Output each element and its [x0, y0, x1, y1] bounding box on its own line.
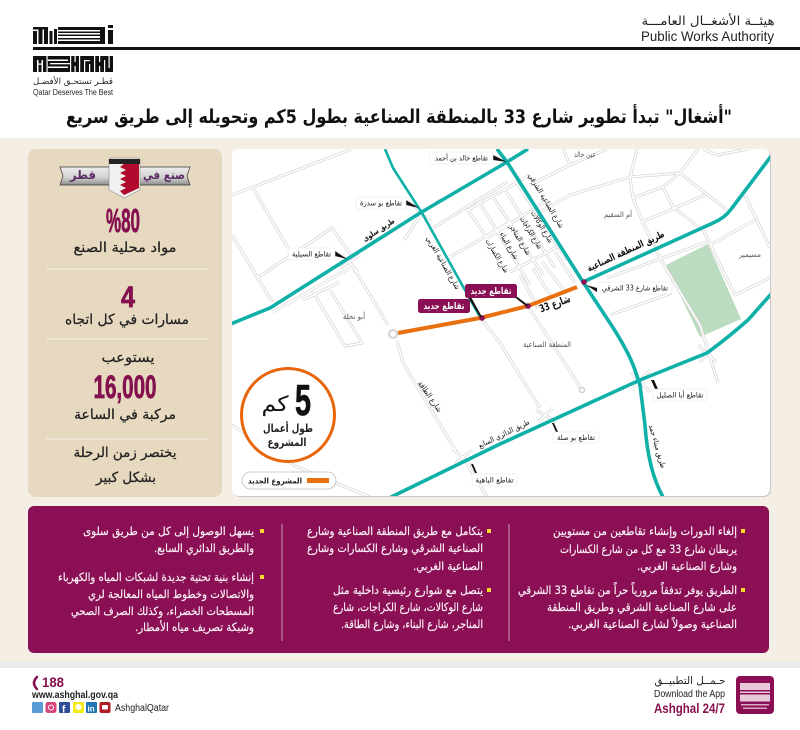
road names: شارع البناء: [498, 231, 521, 261]
bullets: right column: الصناعية وصولاً لشارع الصناعية الغربي.: [568, 616, 737, 632]
footer: contact: [31, 675, 170, 716]
roundabouts: [389, 330, 397, 338]
stat: 80 percent local materials: %80: [106, 202, 140, 239]
bullets: middle column: يتصل مع شوارع رئيسية داخلية مثل: [333, 583, 483, 598]
legend: new project: [242, 472, 336, 489]
logo tagline: Qatar Deserves The Best: [33, 87, 114, 97]
panel: map: [228, 149, 772, 500]
footer: app download: Ashghal 24/7: [654, 700, 725, 716]
bullets: middle column: يتكامل مع طريق المنطقة الصناعية وشارع: [307, 524, 483, 539]
callout: new junction (east): تقاطع جديد: [470, 287, 512, 297]
stat: journey time: [74, 445, 177, 486]
bullets: middle column: [307, 524, 491, 632]
junction label: Street 33 East: [598, 282, 672, 294]
map: streets and parks: [228, 149, 772, 500]
icons: social media: f: [62, 704, 66, 716]
icon: Ashghal app: [736, 676, 774, 714]
bullets: left column: المسطحات الخضراء، وكذلك الصرف الصحي: [71, 604, 254, 619]
junction label: Aba Al Saleel: [653, 389, 707, 401]
junction label: Al Bahiya: [472, 474, 517, 486]
highways: [228, 149, 772, 500]
badge: made in Qatar: قطر: [69, 168, 96, 182]
title: "أشغال" تبدأ تطوير شارع 33 بالمنطقة الصناعية بطول 5كم وتحويله إلى طريق سريع: [66, 104, 732, 128]
callout: new junction (west): [418, 299, 470, 313]
bullets: right column: يربطان شارع 33 مع كل من شارع الكسارات: [560, 542, 737, 557]
road names: طريق المنطقة الصناعية: [586, 229, 666, 274]
bullets: left column: إنشاء بنية تحتية جديدة لشبكات المياه والكهرباء: [58, 570, 254, 585]
footer: app download: [654, 675, 774, 716]
stat: 16,000 vehicles per hour: 16,000: [94, 369, 156, 405]
legend: new project: المشروع الجديد: [248, 476, 302, 486]
stat: 80 percent local materials: مواد محلية الصنع: [74, 240, 176, 256]
bullets: left column: يسهل الوصول إلى كل من طريق سلوى: [83, 524, 254, 539]
junction label: Abu Sidra: [356, 197, 406, 209]
footer: contact: www.ashghal.gov.qa: [31, 690, 118, 701]
panel: key figures: [28, 149, 222, 497]
authority name: Public Works Authority: [641, 28, 774, 44]
place names: [343, 150, 761, 349]
junction label: Khalid bin Ahmed: تقاطع خالد بن أحمد: [435, 152, 488, 162]
footer: app download: Download the App: [654, 688, 725, 700]
callout: new junction (west): تقاطع جديد: [424, 302, 464, 312]
stat: journey time: يختصر زمن الرحلة: [74, 445, 177, 461]
road names: [361, 172, 668, 469]
project road: Street 33: [398, 287, 577, 333]
road names: شارع الكراجات: [518, 215, 544, 250]
road names: شارع 33: [538, 293, 572, 315]
bullets: right column: الطريق يوفر تدفقاً مرورياً حراً من تقاطع 33 الشرقي: [518, 581, 737, 598]
junction label: Aba Al Saleel: تقاطع أبا الصليل: [656, 390, 704, 400]
logo tagline: قطـر تستحـق الأفضـل: [33, 76, 113, 87]
bullets: right column: [518, 524, 745, 632]
road names: شارع الصناعية الغربي: [424, 235, 462, 291]
stat: 16,000 vehicles per hour: مركبة في الساعة: [74, 407, 176, 423]
footer: contact: 188: [42, 675, 64, 690]
authority name: هيئــة الأشغــال العامـــة: [642, 13, 774, 28]
junction label: Abu Sidra: تقاطع بو سدرة: [360, 198, 402, 208]
icons: social media: [32, 702, 110, 716]
callout: new junction (east): [465, 284, 517, 298]
callout: 5 km project length: كم: [262, 392, 288, 417]
junction label pointers: [335, 155, 658, 473]
callout: 5 km project length: طول أعمال: [263, 421, 313, 435]
stat: journey time: بشكل كبير: [95, 470, 156, 486]
place names: مسيمير: [738, 250, 761, 259]
bullets: left column: [58, 524, 264, 635]
footer: app download: حـمــل التطبيــق: [654, 675, 726, 687]
road names: شارع المناجر: [507, 222, 533, 257]
icons: social media: in: [88, 704, 95, 714]
footer: contact: AshghalQatar: [115, 703, 170, 714]
bullets: middle column: الصناعية الغربي.: [413, 559, 483, 574]
callout: 5 km project length: المشروع: [268, 436, 306, 449]
header rule: [33, 47, 800, 50]
junction nodes: [479, 279, 587, 321]
junction label: Al Sailiya: [288, 248, 335, 260]
junction label: Al Sailiya: تقاطع السيلية: [292, 250, 331, 258]
place names: المنطقة الصناعية: [523, 340, 571, 349]
bullets: left column: والطريق الدائري السابع.: [154, 541, 254, 556]
road names: طريق ميناء حمد: [647, 423, 668, 469]
junction label: Street 33 East: تقاطع شارع 33 الشرقي: [602, 284, 668, 292]
logo tagline: [33, 76, 114, 97]
icon: phone: [34, 677, 37, 689]
authority name: [641, 13, 774, 44]
place names: عين خالد: [574, 150, 596, 159]
bullets: right column: إلغاء الدورات وإنشاء تقاطعين من مستويين: [553, 524, 737, 539]
bullets: left column: وشبكة تصريف مياه الأمطار.: [135, 620, 254, 635]
stat: 4 lanes: مسارات في كل اتجاه: [65, 312, 189, 328]
bullets: left column: والاتصالات وخطوط المياه المعالجة لري: [88, 587, 254, 602]
bullets: middle column: شارع الوكالات، شارع الكراجات، شارع: [333, 600, 483, 615]
road names: شارع الطاقة: [416, 379, 444, 414]
park: [666, 244, 741, 337]
road names: شارع الصناعية الشرقي: [526, 172, 566, 230]
place names: أم السقيم: [604, 209, 632, 219]
stat: 16,000 vehicles per hour: [74, 350, 176, 423]
bullets: middle column: الصناعية الشرقي وشارع الكسارات وشارع: [307, 541, 483, 556]
stat: 80 percent local materials: [74, 202, 176, 256]
Ashghal logo: [33, 25, 113, 72]
road names: شارع الوكالات: [529, 209, 555, 244]
callout: 5 km project length: 5: [295, 376, 311, 425]
badge: made in Qatar: صنع في: [143, 168, 185, 182]
road names: طريق الدائري السابع: [477, 417, 531, 450]
bullets: right column: على شارع الصناعية الشرقي وطريق المنطقة: [547, 600, 737, 615]
junction label: Bu Sila: تقاطع بو صلة: [557, 433, 595, 442]
stat: 4 lanes: [65, 281, 189, 328]
stat: 16,000 vehicles per hour: يستوعب: [102, 350, 155, 366]
bullets: middle column: المناجر، شارع البناء، وشارع الطاقة.: [341, 617, 483, 632]
badge: made in Qatar: [60, 158, 190, 198]
panel: project details: [28, 506, 769, 653]
beige content band: [0, 138, 800, 662]
junction label: Khalid bin Ahmed: [430, 152, 493, 164]
road names: طريق سلوى: [361, 216, 396, 243]
place names: أبو نخلة: [343, 311, 365, 321]
bullets: right column: وشارع الصناعية الغربي.: [637, 559, 737, 574]
stat: 4 lanes: 4: [121, 281, 135, 314]
junction label: Al Bahiya: تقاطع الباهية: [476, 476, 514, 484]
callout: 5 km project length: [242, 368, 334, 462]
road names: شارع الكسارات: [483, 237, 511, 274]
